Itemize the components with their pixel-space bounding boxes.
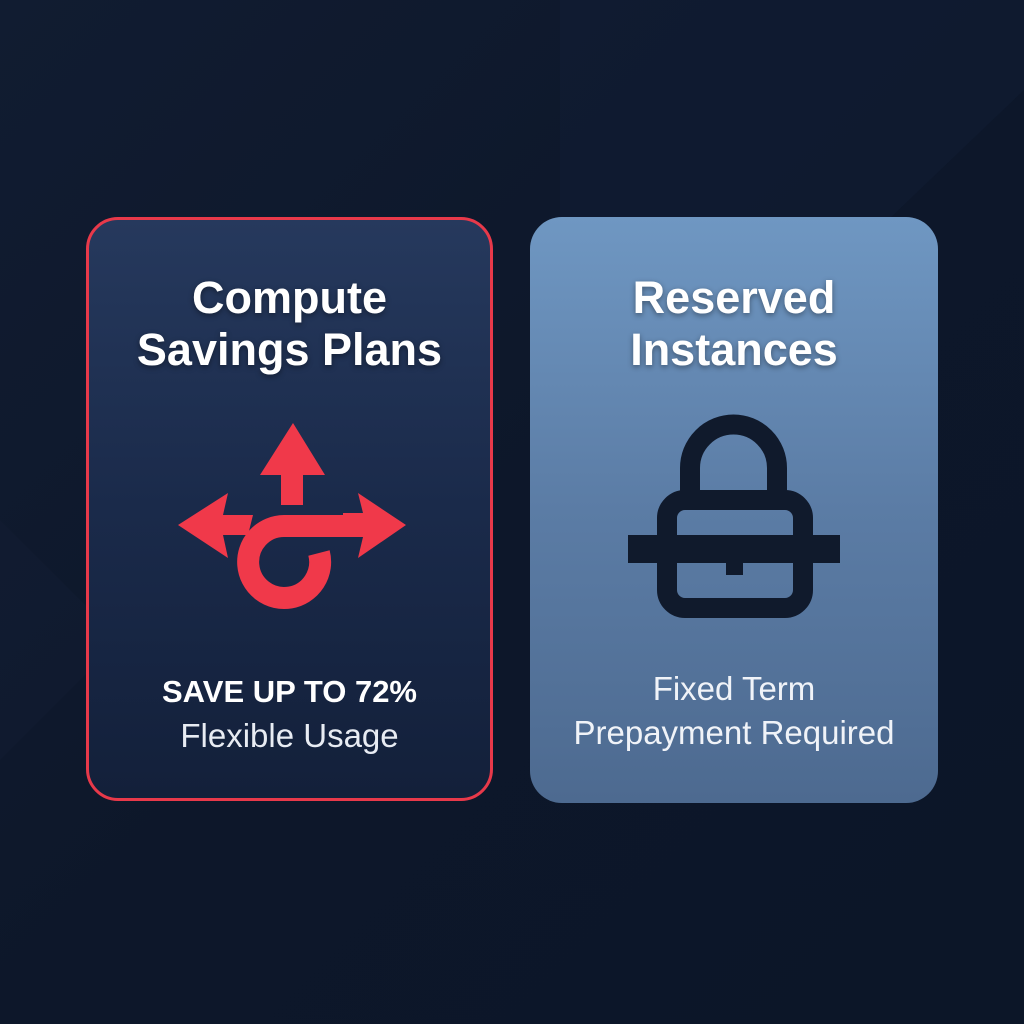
text: fixed term: Prepayment Required [573,714,894,751]
heading: compute savings plans: Compute [192,272,387,323]
text: fixed term: Fixed Term [653,670,815,707]
panel: reserved instances [530,217,938,803]
text: fixed term [573,670,894,751]
heading: reserved instances: Reserved [633,272,835,323]
heading: compute savings plans [137,272,442,378]
panel: compute savings plans [86,217,493,801]
heading: reserved instances [630,272,839,375]
text: flexible usage: Flexible Usage [180,717,399,754]
heading: reserved instances: Instances [630,324,838,375]
heading: compute savings plans: Savings Plans [137,324,442,375]
text: save up to 72%: SAVE UP TO 72% [162,674,417,709]
icon: lock [628,414,840,618]
icon: flexible arrows [178,423,406,609]
